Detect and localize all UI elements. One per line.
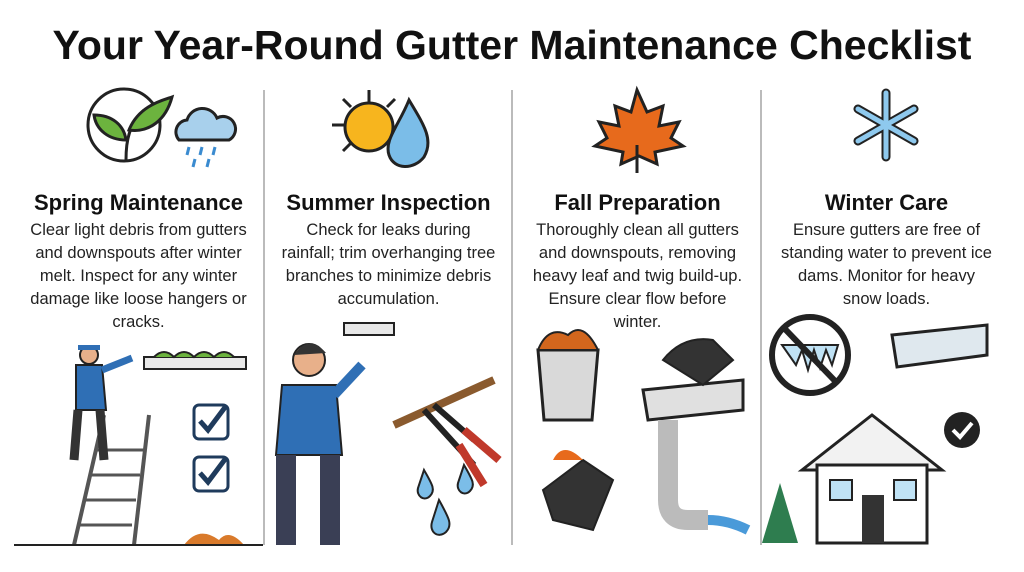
text: damage like loose hangers or [30,290,247,308]
illustration: no ice, gutter, house [762,314,988,544]
text [781,221,992,308]
text: melt. Inspect for any winter [40,267,237,285]
icon: sun and water drop [332,90,430,168]
text: Clear light debris from gutters [30,221,247,239]
panel: spring [14,88,263,546]
text: Check for leaks during [306,221,471,239]
icon: snowflake [854,88,918,162]
text: and downspouts after winter [35,244,242,262]
text: and downspouts, removing [539,244,736,262]
heading: Winter Care [825,190,948,215]
heading: Fall Preparation [554,190,721,215]
text: snow loads. [843,290,930,308]
illustration: worker on ladder [14,345,263,546]
text: dams. Monitor for heavy [798,267,975,285]
text: Ensure gutters are free of [793,221,980,239]
text: Ensure clear flow before [549,290,726,308]
icon: sprout and rain cloud [86,88,238,168]
text: accumulation. [338,290,439,308]
text: branches to minimize debris [286,267,491,285]
panel: summer [274,90,502,545]
text: Thoroughly clean all gutters [536,221,739,239]
heading: Spring Maintenance [34,190,243,215]
panel: winter [762,88,992,544]
illustration: man, pruners, drops [274,322,502,545]
text [282,221,495,308]
panel: fall [533,86,750,534]
text: standing water to prevent ice [781,244,992,262]
icon: maple leaf [591,86,687,173]
illustration: bucket, glove, downspout [536,329,750,534]
text: rainfall; trim overhanging tree [282,244,495,262]
text: heavy leaf and twig build-up. [533,267,742,285]
title: Your Year-Round Gutter Maintenance Checklist [53,22,971,68]
text [533,221,742,331]
text [30,221,247,331]
text: cracks. [112,313,165,331]
heading: Summer Inspection [286,190,491,215]
text: winter. [614,313,661,331]
